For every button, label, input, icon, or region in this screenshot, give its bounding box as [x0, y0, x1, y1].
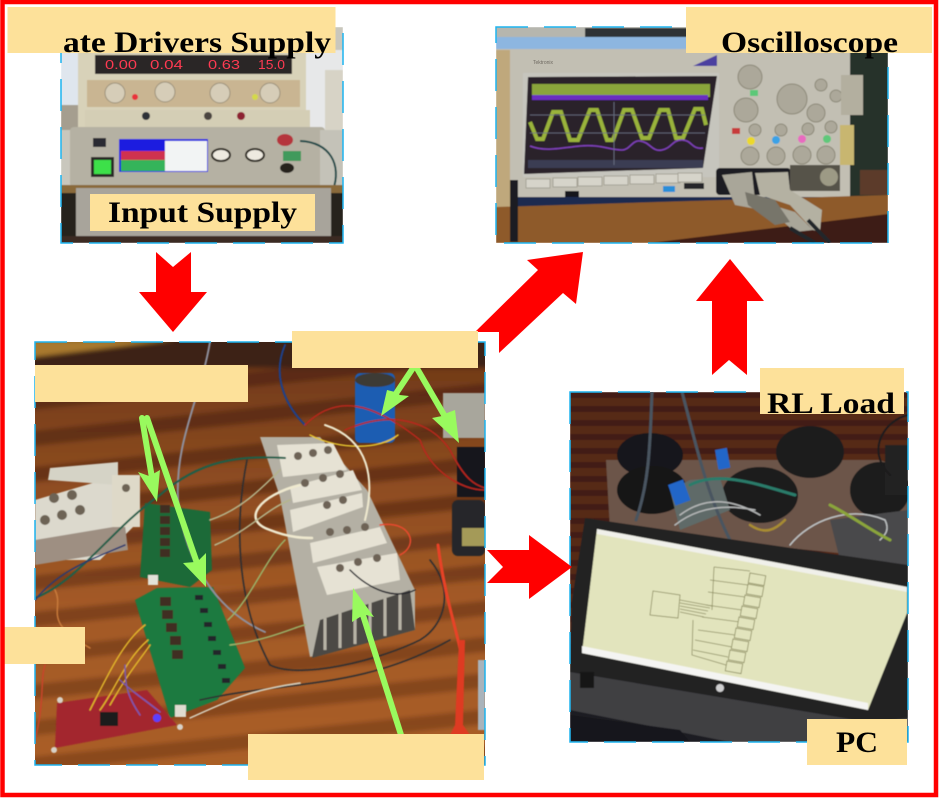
green pointer: to first gate driver board	[138, 418, 160, 502]
label: oscilloscope	[686, 7, 932, 59]
label: RL load: RL Load	[767, 387, 895, 420]
green driver board 1	[140, 503, 212, 587]
heatsink	[260, 437, 415, 657]
electrolytic capacitor	[355, 373, 395, 443]
wood bench surface	[25, 332, 495, 775]
laptop screen	[582, 529, 907, 710]
display digits	[106, 60, 284, 69]
arrow: input supply down to inverter	[139, 252, 207, 332]
spare IGBT modules	[35, 462, 140, 565]
green pointer: to capacitor	[381, 365, 415, 416]
arrow: inverter up to oscilloscope	[475, 252, 583, 353]
label: input supply: Input Supply	[108, 196, 297, 229]
IGBT modules on the heatsink	[277, 443, 400, 595]
photo panel: oscilloscope	[496, 27, 888, 243]
display digits: 0.04	[150, 57, 183, 72]
label: blank capacitor caption	[292, 331, 478, 368]
green pointer: to second gate driver board	[147, 418, 206, 587]
photo panel: input and gate driver power supplies	[61, 27, 343, 243]
green driver board 2	[135, 587, 245, 718]
photo panel: inverter bench with gate driver boards	[25, 332, 495, 775]
laptop base	[570, 670, 908, 742]
label: input supply	[90, 194, 315, 231]
green pointer: to right component	[415, 365, 459, 443]
arrow: load up to oscilloscope	[696, 259, 764, 375]
photo panel: RL load and PC	[570, 392, 910, 742]
wires	[35, 342, 485, 740]
label: blank controller caption	[3, 627, 85, 664]
label: gate drivers supply	[8, 7, 336, 59]
display digits: 0.00	[105, 57, 137, 72]
label: gate drivers supply: ate Drivers Supply	[63, 26, 331, 59]
label: PC	[807, 719, 907, 765]
label: oscilloscope: Oscilloscope	[721, 26, 898, 59]
label: RL load	[760, 368, 904, 420]
right side objects	[443, 393, 485, 438]
arrow: inverter right to PC and load	[487, 535, 572, 599]
display digits: 15.0	[258, 57, 285, 72]
label: PC: PC	[836, 726, 878, 759]
laptop bezel	[570, 518, 908, 722]
green pointer: to IGBT modules	[352, 588, 402, 738]
label: blank gate driver caption	[35, 365, 248, 402]
display digits: 0.63	[208, 57, 240, 72]
label: blank IGBT caption	[248, 734, 484, 780]
photo panel: oscilloscope: Tektronix	[533, 60, 554, 66]
red controller board	[55, 690, 177, 748]
